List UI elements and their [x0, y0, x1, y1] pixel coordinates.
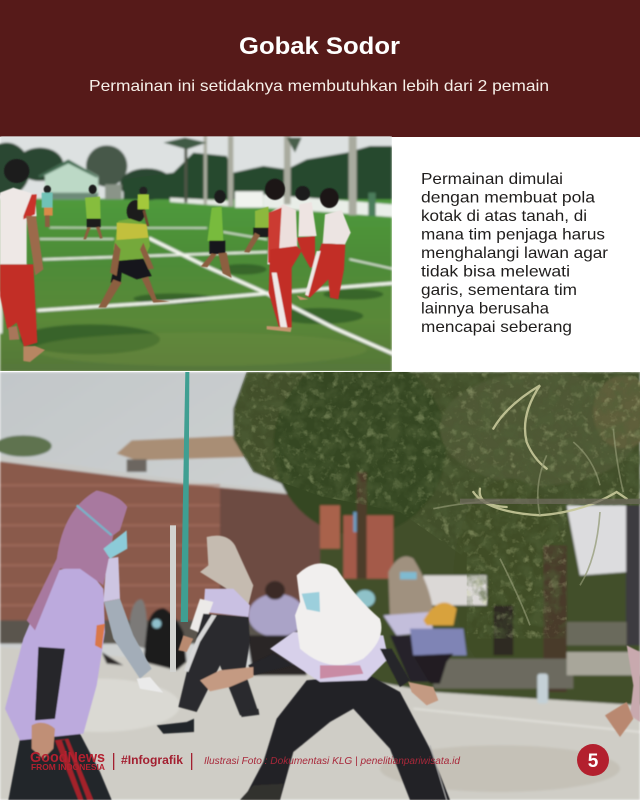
ground — [0, 647, 640, 800]
person: second player with beige hijab — [157, 536, 259, 734]
photo: teenagers playing gobak sodor on concrete court — [0, 355, 640, 800]
text panel: game description: Permainan dimulai — [421, 171, 563, 188]
photo credit: Ilustrasi Foto : Dokumentasi KLG | penelitianpariwisata.id — [204, 756, 460, 767]
footer credits — [30, 744, 609, 776]
photo: children playing gobak sodor on grass field — [0, 136, 392, 372]
player: green jersey walking — [201, 190, 232, 278]
planter and bench — [433, 659, 573, 689]
text panel: game description: kotak di atas tanah, di — [421, 208, 587, 225]
house — [42, 162, 100, 200]
player: small figure far left — [42, 185, 53, 227]
text panel: game description: dengan membuat pola — [421, 190, 595, 206]
logo: GoodNews from Indonesia: FROM INDONESIA — [31, 762, 105, 772]
player: red and white uniform, standing centre right — [265, 179, 302, 332]
brick wall — [0, 460, 268, 622]
hut roof — [117, 435, 247, 460]
shadows on grass — [20, 264, 383, 354]
text panel: game description: tidak bisa melewati — [421, 264, 570, 280]
player: green jersey crouching centre — [98, 200, 170, 308]
tree trunks — [357, 472, 367, 579]
dark carved pillar — [626, 505, 640, 645]
text panel: game description: mencapai seberang — [421, 319, 572, 336]
palm trunks — [184, 136, 357, 215]
player: red and white uniform, background right — [295, 186, 317, 268]
text panel: game description — [392, 137, 640, 371]
logo: GoodNews from Indonesia: GoodNews — [30, 749, 105, 766]
text panel: game description: menghalangi lawan agar — [421, 245, 609, 262]
player: green jersey background — [83, 185, 103, 239]
player: green jersey far right crouching — [244, 207, 270, 253]
text panel: game description: garis, sementara tim — [421, 282, 577, 299]
person: partly hidden walker in grey jeans — [103, 557, 163, 693]
person: arm entering from right edge — [605, 645, 640, 737]
white building — [567, 505, 627, 575]
hashtag: #Infografik — [121, 755, 184, 767]
teal pole — [181, 372, 189, 622]
person: left player in purple hijab — [5, 490, 127, 800]
leaf texture highlights — [473, 385, 627, 515]
text panel: game description: mana tim penjaga harus — [421, 226, 605, 244]
page number badge — [577, 744, 609, 776]
player: red and white uniform, far right — [297, 188, 351, 300]
background scene — [0, 355, 640, 800]
court lines — [1, 228, 392, 353]
text panel: game description: lainnya berusaha — [421, 300, 549, 318]
trees — [233, 372, 640, 705]
player: foreground left, white and red uniform — [0, 159, 45, 362]
title: Gobak Sodor — [239, 33, 400, 60]
subtitle: Permainan ini setidaknya membutuhkan lebih dari 2 pemain — [89, 78, 549, 95]
page number badge: 5 — [588, 751, 599, 772]
white boundary wall — [235, 191, 263, 208]
bottle — [537, 674, 548, 704]
foliage texture — [233, 372, 640, 639]
player: small figure behind centre — [138, 187, 149, 226]
person: centre player in white hijab — [200, 563, 450, 800]
tree line — [0, 143, 392, 200]
small tree left — [0, 435, 52, 457]
seated spectators left — [129, 599, 147, 649]
seated and standing spectators right — [387, 554, 434, 616]
header band — [0, 0, 640, 137]
